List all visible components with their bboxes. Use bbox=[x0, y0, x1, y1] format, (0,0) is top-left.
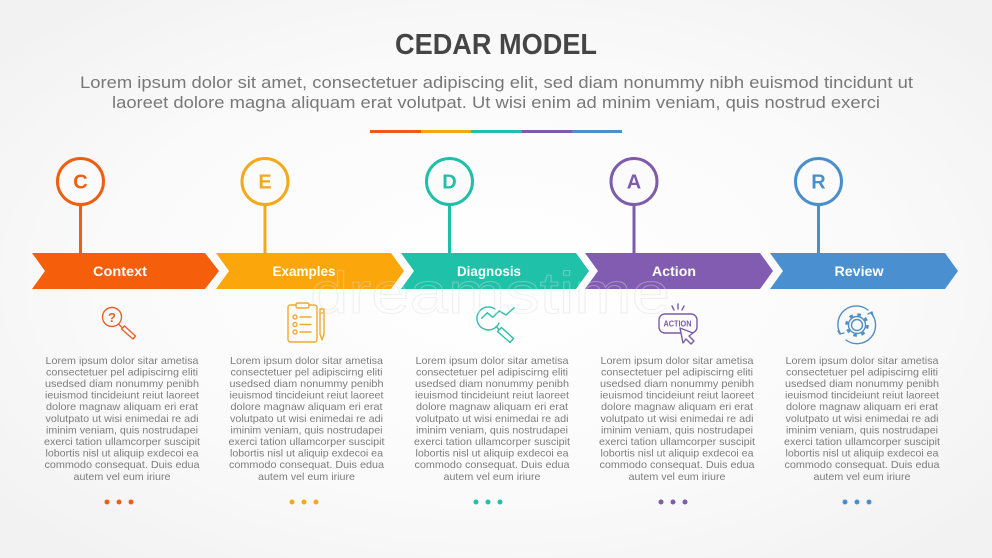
description text: exerci tation ullamcorper suscipit bbox=[784, 437, 940, 448]
pin: C bbox=[58, 158, 104, 254]
description text: exerci tation ullamcorper suscipit bbox=[599, 437, 755, 448]
description text: volutpato ut wisi enimedai re adi bbox=[600, 414, 754, 425]
description text: exerci tation ullamcorper suscipit bbox=[414, 437, 570, 448]
description text: consectetuer pel adipiscirng eliti bbox=[601, 368, 753, 378]
arrow: examples: Examples bbox=[272, 263, 336, 279]
description text: autem vel eum iriure bbox=[74, 472, 171, 483]
description text: lobortis nisl ut aliquip exdecoi ea bbox=[416, 449, 569, 460]
description text: usedsed diam nonummy penibh bbox=[230, 379, 384, 390]
description text: ieuismod tincideiunt reiut laoreet bbox=[415, 391, 569, 402]
pin: D bbox=[426, 158, 472, 254]
arrow: action bbox=[585, 253, 773, 289]
description text: consectetuer pel adipiscirng eliti bbox=[230, 368, 382, 378]
step 3: diagnosis bbox=[401, 158, 589, 504]
pin: C: C bbox=[73, 172, 88, 194]
description text bbox=[44, 356, 200, 483]
description text: volutpato ut wisi enimedai re adi bbox=[416, 414, 568, 425]
description text: commodo consequat. Duis edua bbox=[414, 460, 570, 471]
description text: exerci tation ullamcorper suscipit bbox=[228, 437, 385, 448]
icon: action button with cursor: ACTION bbox=[664, 320, 692, 328]
description text: usedsed diam nonummy penibh bbox=[45, 379, 199, 390]
description text: dolore magnaw aliquam eri erat bbox=[230, 402, 383, 413]
description text: usedsed diam nonummy penibh bbox=[415, 379, 569, 390]
step 5: review bbox=[770, 158, 958, 504]
arrow: diagnosis: Diagnosis bbox=[457, 263, 521, 279]
colored title rule bbox=[370, 130, 622, 133]
description text: autem vel eum iriure bbox=[628, 472, 726, 483]
description text: Lorem ipsum dolor sitar ametisa bbox=[600, 356, 754, 367]
description text: exerci tation ullamcorper suscipit bbox=[44, 437, 200, 448]
description text: usedsed diam nonummy penibh bbox=[600, 379, 754, 390]
step 2: examples bbox=[216, 158, 404, 504]
icon: magnifier with question mark: ? bbox=[108, 310, 116, 325]
description text: iminim veniam, quis nostrudapei bbox=[46, 425, 198, 436]
step 4: action bbox=[585, 158, 773, 504]
dots bbox=[474, 500, 502, 504]
step 1: context bbox=[32, 158, 219, 504]
dots bbox=[658, 500, 688, 504]
description text: ieuismod tincideiunt reiut laoreet bbox=[600, 391, 754, 402]
subtitle text: Lorem ipsum dolor sit amet, consectetuer adipiscing elit, sed diam nonummy nibh euismod tincidunt ut bbox=[80, 73, 913, 92]
description text: Lorem ipsum dolor sitar ametisa bbox=[786, 356, 939, 367]
subtitle text: laoreet dolore magna aliquam erat volutpat. Ut wisi enim ad minim veniam, quis nostrud exerci bbox=[112, 93, 880, 112]
arrow: review: Review bbox=[834, 263, 884, 279]
arrow: diagnosis bbox=[401, 253, 589, 289]
icon: clipboard and pencil bbox=[288, 303, 324, 342]
pin: D: D bbox=[442, 172, 457, 194]
description text: lobortis nisl ut aliquip exdecoi ea bbox=[230, 449, 383, 460]
watermark: dreamstime bbox=[310, 261, 670, 326]
description text: iminim veniam, quis nostrudapei bbox=[416, 425, 568, 436]
pin: A: A bbox=[627, 172, 641, 194]
description text bbox=[599, 356, 755, 483]
dots bbox=[290, 500, 318, 504]
description text: commodo consequat. Duis edua bbox=[229, 460, 384, 471]
description text: consectetuer pel adipiscirng eliti bbox=[416, 368, 568, 378]
description text: volutpato ut wisi enimedai re adi bbox=[786, 414, 938, 425]
description text: commodo consequat. Duis edua bbox=[600, 460, 755, 471]
arrow: examples bbox=[216, 253, 404, 289]
description text: autem vel eum iriure bbox=[258, 472, 355, 483]
description text: iminim veniam, quis nostrudapei bbox=[601, 425, 753, 436]
arrow: context bbox=[32, 253, 219, 289]
description text: lobortis nisl ut aliquip exdecoi ea bbox=[46, 449, 199, 460]
description text: lobortis nisl ut aliquip exdecoi ea bbox=[600, 449, 754, 460]
dots bbox=[842, 500, 872, 504]
description text: Lorem ipsum dolor sitar ametisa bbox=[46, 356, 199, 367]
description text: consectetuer pel adipiscirng eliti bbox=[46, 368, 198, 378]
subtitle text bbox=[80, 73, 913, 112]
description text: ieuismod tincideiunt reiut laoreet bbox=[45, 391, 199, 402]
pin: R bbox=[796, 158, 842, 254]
description text: commodo consequat. Duis edua bbox=[44, 460, 200, 471]
description text: dolore magnaw aliquam eri erat bbox=[416, 402, 568, 413]
pin: E: E bbox=[258, 172, 272, 194]
description text: iminim veniam, quis nostrudapei bbox=[230, 425, 382, 436]
description text: Lorem ipsum dolor sitar ametisa bbox=[416, 356, 569, 367]
description text bbox=[228, 356, 385, 483]
description text: ieuismod tincideiunt reiut laoreet bbox=[785, 391, 939, 402]
description text: volutpato ut wisi enimedai re adi bbox=[230, 414, 383, 425]
title: CEDAR MODEL bbox=[395, 29, 597, 61]
description text bbox=[414, 356, 570, 483]
description text: dolore magnaw aliquam eri erat bbox=[786, 402, 938, 413]
pin: A bbox=[611, 158, 657, 254]
description text: usedsed diam nonummy penibh bbox=[785, 379, 939, 390]
description text: dolore magnaw aliquam eri erat bbox=[46, 402, 198, 413]
description text: ieuismod tincideiunt reiut laoreet bbox=[230, 391, 384, 402]
arrow: review bbox=[770, 253, 958, 289]
description text: Lorem ipsum dolor sitar ametisa bbox=[230, 356, 383, 367]
arrow: context: Context bbox=[93, 263, 147, 279]
description text: dolore magnaw aliquam eri erat bbox=[601, 402, 753, 413]
arrow: action: Action bbox=[652, 263, 696, 279]
description text: autem vel eum iriure bbox=[444, 472, 541, 483]
description text: consectetuer pel adipiscirng eliti bbox=[786, 368, 938, 378]
description text: iminim veniam, quis nostrudapei bbox=[786, 425, 938, 436]
description text bbox=[784, 356, 940, 483]
pin: E bbox=[242, 158, 288, 254]
description text: commodo consequat. Duis edua bbox=[784, 460, 940, 471]
icon: magnifier with question mark bbox=[102, 308, 136, 339]
icon: action button with cursor bbox=[659, 304, 697, 344]
icon: gear with cycle arrows bbox=[838, 306, 876, 344]
icon: magnifier with trend line bbox=[477, 307, 514, 342]
description text: autem vel eum iriure bbox=[814, 472, 911, 483]
description text: lobortis nisl ut aliquip exdecoi ea bbox=[786, 449, 939, 460]
dots bbox=[104, 500, 134, 504]
description text: volutpato ut wisi enimedai re adi bbox=[46, 414, 198, 425]
pin: R: R bbox=[811, 172, 826, 194]
